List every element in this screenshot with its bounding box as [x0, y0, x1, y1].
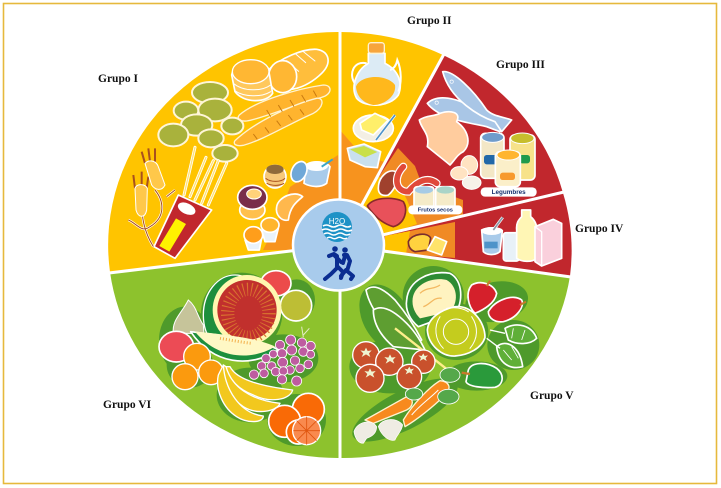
dark green halo: [344, 266, 539, 454]
label: Grupo II: Grupo II: [407, 15, 452, 27]
cupcakes: [244, 218, 279, 250]
green apple: [280, 290, 312, 321]
nuts label: Frutos secos: [418, 208, 453, 214]
label: Grupo I: Grupo I: [98, 73, 138, 85]
label: Grupo VI: Grupo VI: [103, 399, 152, 411]
bread loaf: [268, 49, 328, 93]
grape stem: [302, 327, 309, 337]
central hub: water and exercise: [293, 200, 384, 290]
legumes label: [481, 187, 537, 197]
mushrooms: [354, 420, 403, 443]
watermelon: [203, 275, 281, 355]
ham: [367, 198, 406, 227]
food group IV: dairy: [408, 210, 562, 266]
sugar bowl: [288, 159, 333, 186]
milk glass: [503, 233, 519, 261]
panel: Grupo II sector: [340, 32, 443, 245]
label: Grupo IV: Grupo IV: [575, 223, 624, 235]
potatoes: [158, 82, 243, 162]
pear: [173, 300, 204, 333]
legume jars: [481, 132, 535, 187]
cabbage: [427, 307, 485, 356]
artichokes: [487, 325, 537, 367]
fish: [427, 72, 512, 132]
red apple left: [159, 331, 194, 362]
panel: Grupo V sector: [340, 245, 570, 458]
panel: Grupo VI sector: [110, 245, 340, 458]
cauliflower: [406, 273, 461, 327]
oranges: [172, 343, 223, 390]
pasta package: [154, 195, 212, 258]
croissant: [276, 194, 303, 220]
chicken: [419, 112, 468, 165]
icon: water H2O: H2O: [329, 217, 345, 226]
nuts jars: [414, 186, 455, 208]
dark green halo: [159, 273, 326, 446]
red apple top: [261, 271, 291, 296]
red peppers: [468, 281, 526, 322]
wheat ears: [128, 148, 175, 247]
sausages: [378, 167, 437, 195]
icon: runners: [325, 246, 353, 279]
food group V: vegetables: [344, 266, 539, 454]
tomatoes: [353, 342, 435, 392]
tangerines: [269, 393, 324, 445]
food group VI: fruits: [159, 271, 326, 446]
eggs: [451, 156, 481, 189]
bananas: [218, 365, 293, 422]
legumes label: Legumbres: [492, 189, 526, 196]
label: Grupo V: Grupo V: [530, 390, 574, 402]
carrots: [365, 381, 449, 427]
milk carton: [535, 219, 562, 266]
nuts label: [408, 205, 462, 214]
margarine tub: [347, 144, 381, 168]
sliced bread: [232, 60, 273, 101]
baguettes: [234, 85, 330, 146]
chard leaves: [366, 287, 450, 372]
melon slice: [191, 332, 278, 361]
food wheel: [108, 32, 572, 458]
grapes: [249, 335, 315, 386]
label: Grupo III: Grupo III: [496, 59, 545, 71]
panel: Grupo IV sector: [340, 193, 572, 276]
sector dividers: [109, 32, 571, 458]
green pepper: [462, 364, 502, 388]
panel: Grupo I sector: [108, 32, 340, 272]
food group III: fish, meat, eggs, legumes: [367, 72, 537, 227]
panel: Grupo III sector: [340, 55, 563, 245]
hub disc: [293, 200, 384, 290]
food group II: oils and fats: [347, 43, 401, 168]
oil jar: [352, 43, 401, 105]
food group I: cereals and bread: [128, 49, 333, 258]
pastries: biscuits and donuts: [238, 165, 286, 219]
carrot tops: [405, 368, 460, 404]
milk bottle: [517, 210, 537, 261]
yogurt cup: [482, 217, 503, 255]
cheese: [408, 234, 447, 255]
spaghetti: [184, 147, 227, 205]
tomato stems: [360, 348, 428, 378]
butter dish: [353, 113, 395, 142]
